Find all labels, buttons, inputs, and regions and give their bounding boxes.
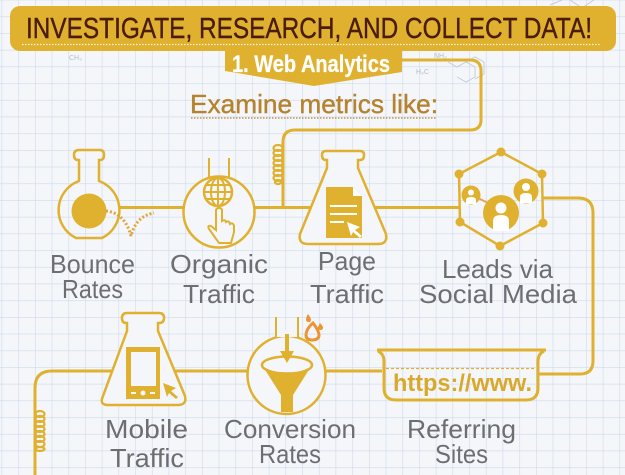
- coil: bottom: [36, 411, 44, 451]
- label: page traffic: Traffic: [310, 279, 384, 309]
- faint chemistry sketches: [69, 0, 594, 82]
- label: leads via social media: [419, 254, 578, 309]
- label: leads via social media: Leads via: [442, 254, 554, 284]
- label: bounce rates: Rates: [62, 274, 123, 304]
- label: organic traffic: Organic: [170, 249, 268, 279]
- connector: top row: [120, 206, 460, 209]
- faint chemistry sketches: NH₂: [434, 53, 447, 60]
- connector: web analytics to metrics: [283, 60, 481, 207]
- label: conversion rates: Rates: [259, 439, 321, 469]
- section ribbon: 1. Web Analytics: [232, 51, 390, 78]
- label: mobile traffic: Traffic: [110, 443, 184, 473]
- icon: referring sites bowl: https://www.: [393, 370, 532, 397]
- label: organic traffic: [170, 249, 268, 309]
- icon: flame: [306, 314, 323, 340]
- label: referring sites: Referring: [407, 414, 516, 444]
- icon: mobile traffic flask: [102, 313, 185, 405]
- label: leads via social media: Social Media: [419, 279, 578, 309]
- connector: right side to bowl: [537, 198, 593, 374]
- faint chemistry sketches: CH₃: [69, 55, 82, 62]
- label: bounce rates: [50, 249, 135, 304]
- label: page traffic: [310, 246, 384, 309]
- icon: organic traffic globe and hand: [184, 158, 254, 248]
- subheading: Examine metrics like:: [190, 89, 438, 119]
- label: page traffic: Page: [318, 246, 376, 276]
- icon: bounce flask: [59, 150, 154, 238]
- label: mobile traffic: Mobile: [105, 414, 188, 444]
- label: organic traffic: Traffic: [183, 279, 255, 309]
- label: referring sites: [407, 414, 516, 469]
- icon: social media network: [454, 148, 548, 250]
- label: conversion rates: [224, 414, 356, 469]
- icon: page traffic flask: [300, 151, 386, 244]
- label: bounce rates: Bounce: [50, 249, 135, 279]
- icon: referring sites bowl: [377, 350, 546, 400]
- icon: conversion funnel: [248, 317, 326, 414]
- label: mobile traffic: [105, 414, 188, 473]
- connector: bottom row: [35, 371, 382, 475]
- coil: top: [274, 145, 282, 184]
- label: referring sites: Sites: [435, 439, 488, 469]
- title banner: [10, 6, 616, 51]
- label: conversion rates: Conversion: [224, 414, 356, 444]
- faint chemistry sketches: H₃C: [416, 69, 429, 76]
- section ribbon: [225, 51, 402, 86]
